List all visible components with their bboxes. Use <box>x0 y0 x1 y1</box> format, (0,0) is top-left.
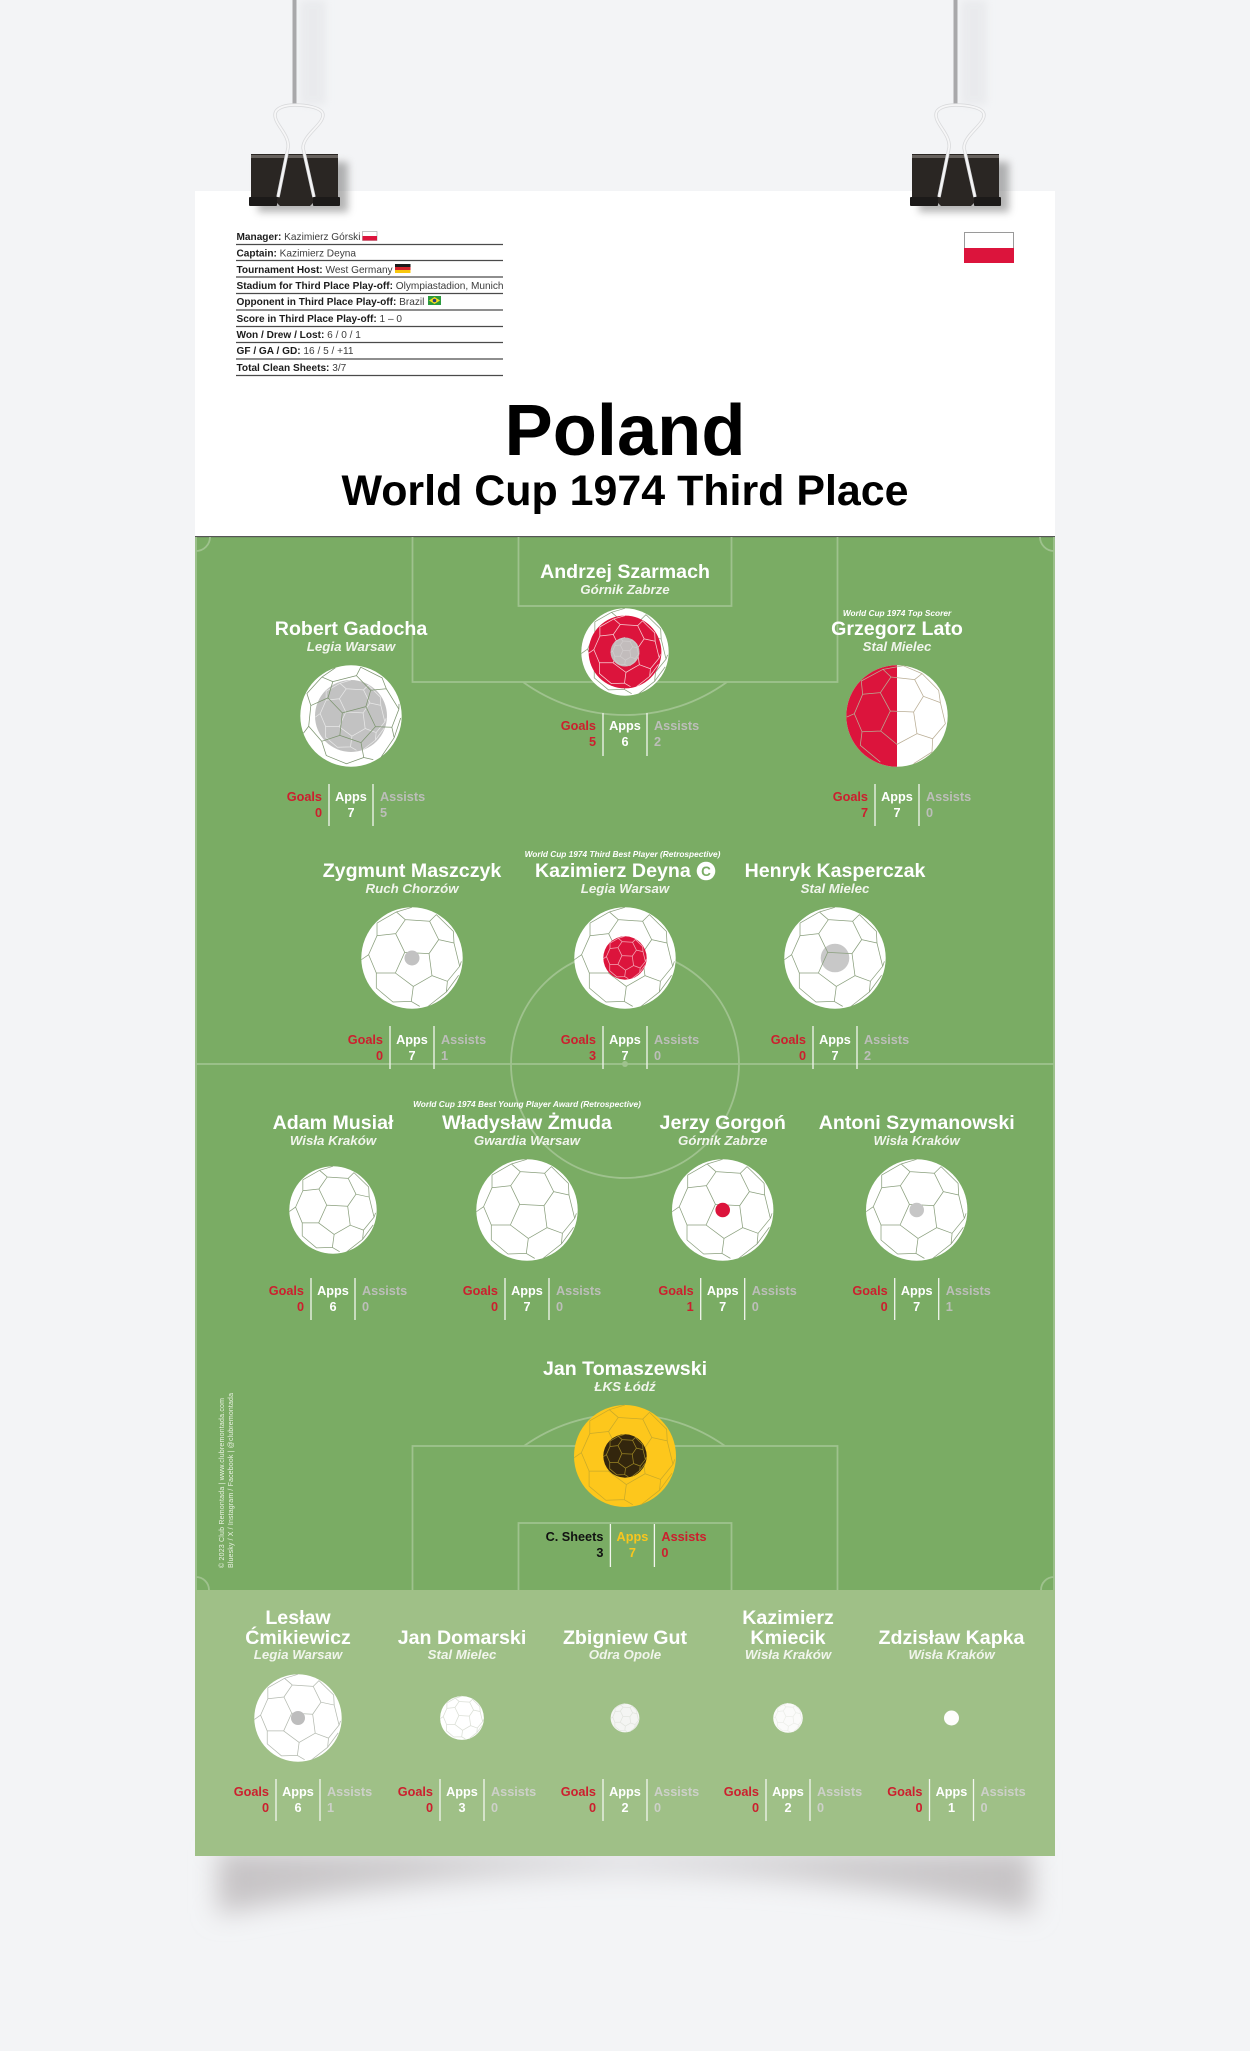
stats: Assists <box>362 1284 407 1298</box>
player: Grzegorz Lato: Stal Mielec <box>863 639 932 654</box>
stats: Assists <box>864 1033 909 1047</box>
stats: 7 <box>913 1300 920 1314</box>
stats: 2 <box>621 1801 629 1815</box>
icon: Germany flag <box>395 264 410 273</box>
stats: 6 <box>329 1300 337 1314</box>
ball <box>944 1710 959 1726</box>
stats: 6 <box>621 735 629 749</box>
substitute: Jan Domarski: Jan Domarski <box>398 1627 526 1649</box>
icon: captain badge <box>697 862 715 880</box>
ball <box>440 1696 484 1740</box>
stats: Assists <box>980 1785 1026 1799</box>
stats: 0 <box>376 1049 383 1063</box>
info table: Manager: Kazimierz Górski <box>236 232 360 243</box>
player: Jan Tomaszewski <box>543 1358 707 1567</box>
stats <box>269 1278 407 1320</box>
player: Robert Gadocha <box>275 618 428 826</box>
stats <box>561 1026 699 1069</box>
stats: 1 <box>946 1300 953 1314</box>
stats: Apps <box>317 1284 349 1298</box>
stats: Goals <box>852 1284 888 1298</box>
stats: 0 <box>491 1300 498 1314</box>
player: Władysław Żmuda: Władysław Żmuda <box>442 1111 613 1134</box>
stats <box>348 1026 486 1069</box>
substitute: Zbigniew Gut <box>561 1627 699 1821</box>
credits <box>218 1393 235 1568</box>
ball <box>611 1704 639 1732</box>
stats: Apps <box>936 1785 967 1799</box>
stats: Apps <box>511 1284 543 1298</box>
stats: Goals <box>348 1033 383 1047</box>
player: Władysław Żmuda <box>413 1099 641 1320</box>
stats: 0 <box>491 1801 498 1815</box>
poster shadow <box>218 1850 1032 1914</box>
panel: pitch <box>195 536 1055 1590</box>
stats <box>546 1524 707 1567</box>
stats: Apps <box>396 1033 428 1047</box>
player: Robert Gadocha: Robert Gadocha <box>275 618 428 640</box>
stats: 5 <box>589 735 596 749</box>
stats: Goals <box>269 1284 304 1298</box>
info table: Score in Third Place Play-off: 1 – 0 <box>236 314 402 325</box>
binder clip left <box>249 105 348 212</box>
stats: 0 <box>654 1049 661 1063</box>
stats: 0 <box>980 1801 988 1815</box>
stats <box>561 713 699 756</box>
stats: Apps <box>772 1785 804 1799</box>
substitute: Jan Domarski: Stal Mielec <box>428 1647 497 1662</box>
player: Antoni Szymanowski: Wisła Kraków <box>874 1133 962 1148</box>
stats: 1 <box>948 1801 955 1815</box>
stats: Apps <box>819 1033 851 1047</box>
stats: Goals <box>658 1284 694 1298</box>
stats <box>724 1779 862 1821</box>
stats: Goals <box>561 1033 596 1047</box>
player: Andrzej Szarmach: Andrzej Szarmach <box>540 561 710 583</box>
substitute: Kazimierz Kmiecik: Kazimierz <box>742 1607 834 1629</box>
icon: Poland flag small <box>362 232 377 240</box>
credits: Bluesky / X / Instagram / Facebook | @clubremontada <box>228 1393 235 1568</box>
player: Zygmunt Maszczyk: Ruch Chorzów <box>365 881 460 896</box>
player: Henryk Kasperczak <box>745 860 925 1069</box>
ball: assists 1 <box>866 1159 967 1261</box>
substitute: Lesław Ćmikiewicz <box>234 1607 372 1821</box>
substitute: Lesław Ćmikiewicz: Ćmikiewicz <box>245 1625 351 1649</box>
stats <box>287 784 425 826</box>
icon: captain badge: C <box>701 864 711 879</box>
stats: 7 <box>861 806 868 820</box>
stats: Goals <box>724 1785 759 1799</box>
info table: GF / GA / GD: 16 / 5 / +11 <box>236 346 354 357</box>
player: Adam Musiał: Wisła Kraków <box>290 1133 378 1148</box>
substitute: Kazimierz Kmiecik <box>724 1607 862 1821</box>
title: Poland <box>504 391 746 471</box>
stats: 7 <box>629 1546 636 1560</box>
info table: Stadium for Third Place Play-off: Olympiastadion, Munich <box>236 281 504 292</box>
stats: 3 <box>458 1801 466 1815</box>
stats: 0 <box>661 1546 668 1560</box>
stats: Assists <box>817 1785 862 1799</box>
player: Zygmunt Maszczyk: Zygmunt Maszczyk <box>323 860 501 882</box>
substitute: Lesław Ćmikiewicz: Lesław <box>265 1607 331 1629</box>
stats <box>658 1278 797 1320</box>
player: Władysław Żmuda: Gwardia Warsaw <box>474 1133 582 1148</box>
stats: 0 <box>426 1801 433 1815</box>
hanging wire left <box>292 0 326 106</box>
stats <box>561 1779 699 1821</box>
stats: 7 <box>408 1049 416 1063</box>
stats: Assists <box>752 1284 797 1298</box>
stats: 7 <box>621 1049 629 1063</box>
player: Grzegorz Lato: World Cup 1974 Top Scorer <box>843 608 952 618</box>
stats <box>234 1779 372 1821</box>
stats <box>887 1779 1026 1821</box>
player: Antoni Szymanowski: Antoni Szymanowski <box>819 1112 1015 1134</box>
stats: Goals <box>398 1785 433 1799</box>
stats: 0 <box>589 1801 596 1815</box>
substitute: Jan Domarski <box>398 1627 536 1821</box>
ball: clean sheets 3 <box>574 1405 676 1507</box>
stats: Goals <box>833 790 868 804</box>
stats: Goals <box>771 1033 806 1047</box>
player: Grzegorz Lato: Grzegorz Lato <box>831 618 963 640</box>
stats: 5 <box>380 806 387 820</box>
stats: 0 <box>926 806 933 820</box>
ball: goals 3 <box>574 907 676 1009</box>
stats: Assists <box>654 719 699 733</box>
stats: Assists <box>491 1785 536 1799</box>
player: Jerzy Gorgoń: Górnik Zabrze <box>678 1133 768 1148</box>
player: Grzegorz Lato <box>831 608 971 826</box>
stats: C. Sheets <box>546 1530 603 1544</box>
stats: 0 <box>654 1801 661 1815</box>
icon: Brazil flag <box>428 296 441 305</box>
stats: 0 <box>752 1300 759 1314</box>
stats: 7 <box>719 1300 726 1314</box>
stats: Apps <box>707 1284 739 1298</box>
stats <box>833 784 971 826</box>
ball <box>773 1703 803 1733</box>
stats: 7 <box>347 806 355 820</box>
stats: 3 <box>589 1049 596 1063</box>
substitute: Kazimierz Kmiecik: Kmiecik <box>750 1627 826 1649</box>
ball: goals 1 <box>672 1159 773 1261</box>
stats: 0 <box>915 1801 922 1815</box>
stats: 2 <box>864 1049 871 1063</box>
stats: 7 <box>831 1049 839 1063</box>
stats: Goals <box>561 1785 596 1799</box>
stats: 1 <box>327 1801 334 1815</box>
stats: Assists <box>327 1785 372 1799</box>
player: Władysław Żmuda: World Cup 1974 Best Young Player Award (Retrospective) <box>413 1099 641 1109</box>
stats: 7 <box>893 806 901 820</box>
binder clip right <box>910 105 1009 212</box>
stats: Apps <box>282 1785 314 1799</box>
stats: Assists <box>661 1530 707 1544</box>
player: Henryk Kasperczak: Henryk Kasperczak <box>745 860 925 882</box>
stats: Assists <box>654 1785 699 1799</box>
stats: 0 <box>799 1049 806 1063</box>
substitute: Kazimierz Kmiecik: Wisła Kraków <box>745 1647 833 1662</box>
panel: bench <box>195 1590 1055 1856</box>
substitute: Zdzisław Kapka: Wisła Kraków <box>908 1647 996 1662</box>
hanging wire right <box>954 0 987 106</box>
stats: 0 <box>362 1300 369 1314</box>
substitute: Lesław Ćmikiewicz: Legia Warsaw <box>254 1647 344 1662</box>
stats: Assists <box>556 1284 601 1298</box>
ball: assists 5 <box>287 653 413 778</box>
stats: Assists <box>946 1284 991 1298</box>
player: Zygmunt Maszczyk <box>323 860 501 1069</box>
info table <box>236 232 504 376</box>
stats: Goals <box>561 719 596 733</box>
ball: goals 7 <box>846 665 948 767</box>
substitute: Zbigniew Gut: Odra Opole <box>589 1647 662 1662</box>
stats: 0 <box>297 1300 304 1314</box>
ball: goals 5 assists 2 <box>581 608 669 696</box>
player: Kazimierz Deyna: World Cup 1974 Third Best Player (Retrospective) <box>525 849 721 859</box>
stats: 3 <box>596 1546 603 1560</box>
subtitle: World Cup 1974 Third Place <box>341 467 909 515</box>
info table: Won / Drew / Lost: 6 / 0 / 1 <box>236 330 361 341</box>
player: Adam Musiał <box>269 1112 407 1320</box>
stats: Assists <box>380 790 425 804</box>
stats: Assists <box>926 790 971 804</box>
ball: assists 2 <box>784 907 886 1009</box>
stats <box>852 1278 991 1320</box>
player: Andrzej Szarmach: Górnik Zabrze <box>580 582 670 597</box>
stats: Apps <box>881 790 913 804</box>
stats: 1 <box>441 1049 448 1063</box>
info table: Captain: Kazimierz Deyna <box>236 248 356 260</box>
player: Jan Tomaszewski: ŁKS Łódź <box>593 1379 656 1394</box>
player: Kazimierz Deyna: Kazimierz Deyna <box>535 860 692 882</box>
stats <box>463 1278 601 1320</box>
player: Kazimierz Deyna: Legia Warsaw <box>581 881 671 896</box>
info table: Tournament Host: West Germany <box>236 265 394 276</box>
substitute: Zdzisław Kapka: Zdzisław Kapka <box>879 1627 1026 1649</box>
player: Antoni Szymanowski <box>819 1112 1015 1320</box>
player: Henryk Kasperczak: Stal Mielec <box>801 881 870 896</box>
stats: 0 <box>817 1801 824 1815</box>
stats: 7 <box>523 1300 531 1314</box>
stats: 2 <box>654 735 661 749</box>
ball <box>476 1159 578 1261</box>
stats: 6 <box>294 1801 302 1815</box>
info table: Opponent in Third Place Play-off: Brazil <box>236 297 424 308</box>
player: Jerzy Gorgoń: Jerzy Gorgoń <box>660 1112 786 1134</box>
stats: Assists <box>441 1033 486 1047</box>
player: Jan Tomaszewski: Jan Tomaszewski <box>543 1358 707 1380</box>
stats: Apps <box>609 1033 641 1047</box>
stats <box>398 1779 536 1821</box>
info table: Total Clean Sheets: 3/7 <box>236 363 347 374</box>
player: Robert Gadocha: Legia Warsaw <box>307 639 397 654</box>
ball: assists 1 <box>361 907 463 1009</box>
stats: Goals <box>234 1785 269 1799</box>
player: Adam Musiał: Adam Musiał <box>273 1112 394 1134</box>
stats: 0 <box>315 806 322 820</box>
player: Jerzy Gorgoń <box>658 1112 797 1320</box>
credits: © 2023 Club Remontada | www.clubremontada.com <box>218 1398 226 1568</box>
stats: Apps <box>609 719 641 733</box>
stats: Assists <box>654 1033 699 1047</box>
stats: Goals <box>887 1785 922 1799</box>
stats <box>771 1026 909 1069</box>
substitute: Zbigniew Gut: Zbigniew Gut <box>563 1627 688 1649</box>
stats: Apps <box>609 1785 641 1799</box>
stats: 1 <box>687 1300 694 1314</box>
stats: Apps <box>617 1530 648 1544</box>
stats: Goals <box>287 790 322 804</box>
ball <box>289 1166 377 1254</box>
player: Andrzej Szarmach <box>540 561 710 756</box>
flag: Poland <box>964 232 1014 263</box>
stats: 0 <box>752 1801 759 1815</box>
stats: Goals <box>463 1284 498 1298</box>
player: Kazimierz Deyna <box>525 849 721 1069</box>
stats: 0 <box>556 1300 563 1314</box>
stats: Apps <box>335 790 367 804</box>
poster sheet <box>195 191 1055 537</box>
substitute: Zdzisław Kapka <box>879 1627 1026 1821</box>
stats: 2 <box>784 1801 792 1815</box>
stats: 0 <box>262 1801 269 1815</box>
stats: Apps <box>446 1785 478 1799</box>
stats: Apps <box>901 1284 933 1298</box>
stats: 0 <box>881 1300 888 1314</box>
ball: assists 1 <box>254 1674 342 1762</box>
